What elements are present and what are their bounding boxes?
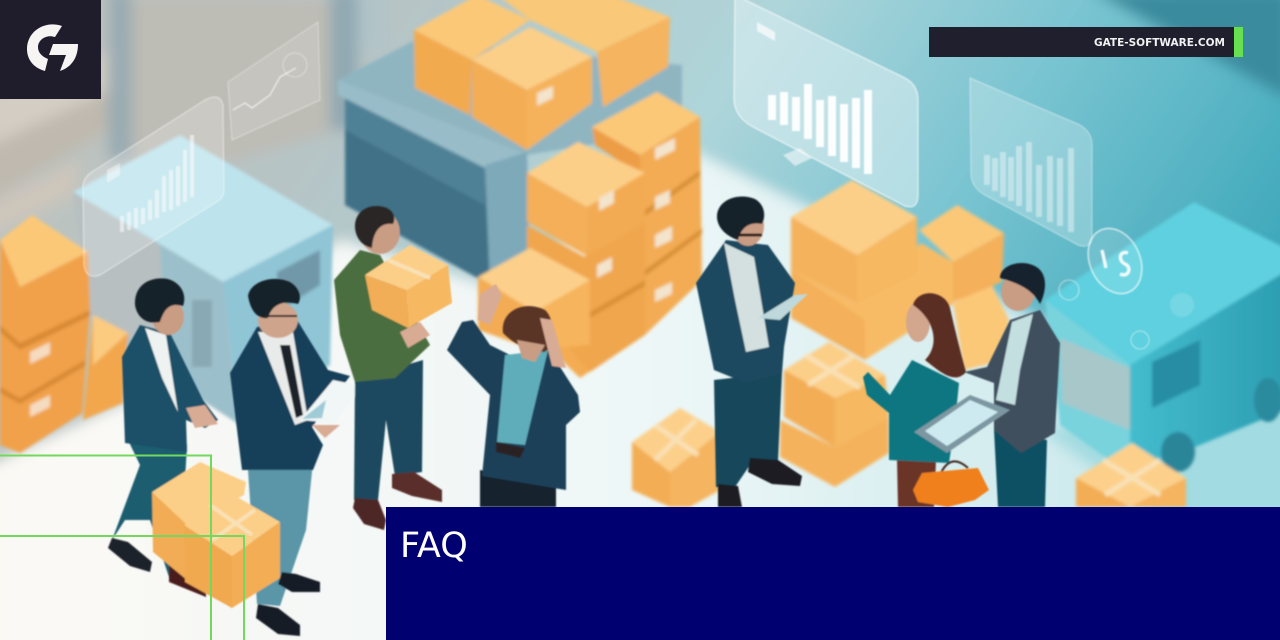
floating chart panel: left bar chart [83, 97, 224, 276]
website address bar [929, 27, 1243, 57]
heading: FAQ [400, 526, 468, 566]
boxes: pair by woman [780, 342, 889, 487]
floating chart panel: right bar chart [970, 78, 1092, 246]
boxes: central tower [478, 92, 702, 378]
person: man in navy suit [108, 278, 218, 596]
icon: location badge [1059, 220, 1194, 349]
person: woman in teal with orange bag [863, 293, 989, 507]
person: man with tablet [230, 279, 362, 636]
box: bottom right [1076, 443, 1186, 507]
foreground people group [108, 196, 1060, 636]
website address bar: GATE-SOFTWARE.COM [1094, 37, 1225, 49]
person: man in green jacket carrying box [334, 206, 452, 530]
machine: central blue table [338, 40, 682, 285]
boxes: right stack [791, 180, 1009, 370]
box: floor box by tablet man [632, 408, 720, 507]
boxes: left stack [0, 215, 128, 453]
machine: left blue unit [73, 135, 333, 425]
person: man in glasses with tablet [696, 196, 808, 507]
boxes: upper centre group [414, 0, 670, 150]
person: worried man with hand on head [447, 284, 580, 507]
icon: G logo [27, 24, 78, 71]
floating chart panel: upper left graph [228, 22, 320, 140]
truck [1045, 202, 1280, 475]
title panel [386, 507, 1280, 640]
floating chart panel: centre bar chart [734, 0, 918, 207]
logo block [0, 0, 101, 99]
background objects group [0, 0, 1280, 507]
box: pair at bottom left [152, 462, 280, 608]
person: man in grey jacket with tablet [914, 263, 1060, 507]
